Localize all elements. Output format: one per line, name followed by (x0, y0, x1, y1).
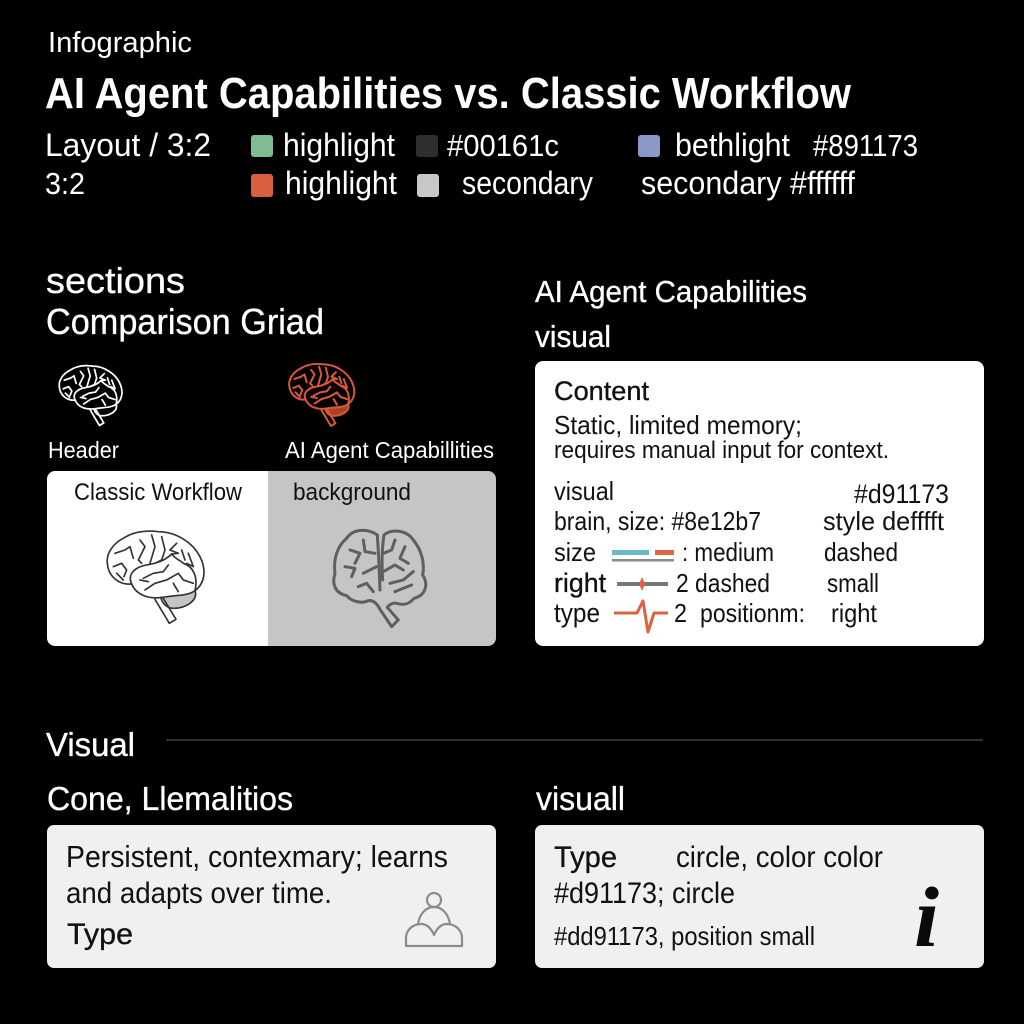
card heading: Content (554, 376, 649, 406)
layout label: 3:2 (45, 166, 85, 201)
spec rows: 2 dashed (676, 568, 770, 598)
description: Persistent, contexmary; learns (66, 839, 448, 874)
spec rows: 2 (674, 598, 687, 628)
section label: visual: Visual (46, 726, 135, 763)
right section heading (535, 274, 807, 354)
right section heading: visual (535, 319, 611, 354)
left section heading (46, 260, 324, 342)
spec rows: type (554, 598, 600, 628)
spec text: circle, color color (676, 841, 883, 874)
colour legend: #891173 (813, 128, 918, 163)
spec rows: : medium (682, 537, 774, 567)
description (66, 839, 448, 910)
eyebrow label: Infographic (48, 27, 192, 59)
icon: front-view brain (334, 530, 426, 627)
column labels (48, 437, 494, 463)
layout label: Layout / 3:2 (45, 127, 211, 163)
right section heading: AI Agent Capabilities (535, 274, 807, 309)
colour legend: highlight (285, 165, 397, 201)
spec rows: #d91173 (854, 479, 949, 509)
line sample: dashed (612, 550, 674, 562)
title: AI Agent Capabilities vs. Classic Workflow (45, 69, 852, 118)
spec text (554, 841, 883, 951)
colour legend (251, 127, 918, 201)
spec text: #d91173; circle (554, 877, 735, 910)
spec rows: positionm: (700, 598, 805, 628)
spec rows: right (831, 598, 878, 628)
icon: info: i (914, 869, 939, 965)
colour legend: secondary #ffffff (641, 165, 855, 201)
spec rows: small (827, 568, 879, 598)
panel: comparison grid (47, 471, 496, 646)
spec rows: visual (554, 476, 614, 506)
colour legend: bethlight (675, 127, 790, 163)
spec text: #dd91173, position small (554, 921, 815, 951)
subheading: left: Cone, Llemalitios (47, 780, 293, 817)
colour legend: #00161c (447, 128, 559, 163)
description: Static, limited memory; (554, 410, 802, 440)
line sample: pulse (614, 601, 668, 632)
column labels: AI Agent Capabillities (285, 437, 494, 463)
panel: bottom right card (535, 825, 984, 968)
type label: Type (67, 918, 133, 951)
colour legend: secondary (462, 165, 593, 201)
icon: person (406, 893, 462, 946)
panel: content card (535, 361, 984, 646)
spec rows: right (554, 568, 606, 598)
icon: side-view brain (107, 531, 204, 623)
column labels: Header (48, 437, 119, 463)
layout label (45, 127, 211, 201)
description: and adapts over time. (66, 877, 332, 910)
subheading: right: visuall (536, 780, 625, 817)
background half (268, 471, 496, 646)
left section heading: sections (46, 260, 185, 301)
left section heading: Comparison Griad (46, 301, 324, 342)
icon: white brain (59, 366, 122, 426)
classic workflow label: Classic Workflow (74, 479, 243, 506)
colour legend: highlight (283, 127, 395, 163)
spec rows: size (554, 537, 596, 567)
description: requires manual input for context. (554, 437, 889, 464)
icon: orange brain (289, 364, 354, 426)
spec rows: dashed (824, 537, 898, 567)
line sample: marker (617, 577, 668, 591)
panel: bottom left card (47, 825, 496, 968)
background label: background (293, 479, 411, 506)
classic workflow half (47, 471, 268, 646)
spec rows: style defffft (823, 506, 945, 536)
spec rows: brain, size: #8e12b7 (554, 506, 761, 536)
description (554, 410, 889, 464)
spec text: Type (554, 841, 617, 874)
spec rows (554, 476, 949, 628)
